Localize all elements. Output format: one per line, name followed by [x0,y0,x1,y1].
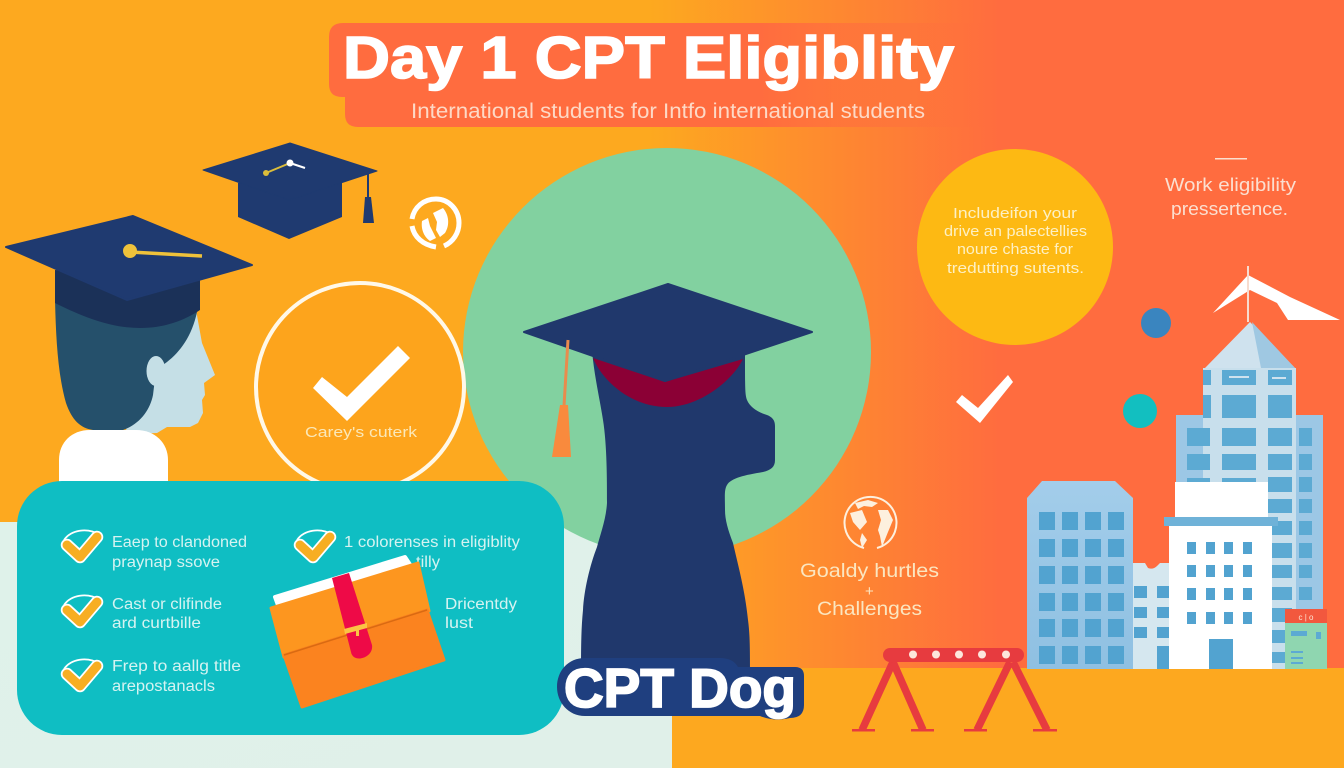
check circle callout: Carey's cuterk [305,424,418,441]
work eligibility text [1165,158,1297,219]
subtitle: International students for Intfo international students [411,100,925,123]
check item 2: ard curtbille [112,615,201,632]
icon: globe [844,497,896,548]
check item 3 [64,658,241,695]
middle building [1133,563,1169,669]
title: Day 1 CPT Eligiblity [343,25,954,91]
work eligibility text: pressertence. [1171,198,1288,219]
check item 4 [297,530,520,571]
yellow info circle [917,149,1113,345]
icon: white check [956,375,1013,423]
check item 4: tilly [416,554,440,571]
yellow info circle: noure chaste for [957,242,1073,258]
graduate silhouette with cap [524,284,812,680]
blue dot [1141,308,1171,338]
work eligibility text: Work eligibility [1165,174,1297,195]
side note: lust [445,615,474,632]
student face [125,310,215,434]
teal checklist panel [17,481,564,735]
white building [1164,482,1278,669]
cap button and cord [123,244,202,258]
CPT Dog badge: CPT Dog [564,657,796,719]
student profile with cap [6,216,252,482]
check circle callout [256,283,464,491]
student hair [55,300,197,430]
yellow info circle: tredutting sutents. [947,261,1084,277]
crimson band [593,358,743,407]
left building [1027,481,1133,669]
student ear [146,356,166,386]
small shop: c | o [1299,613,1314,622]
yellow info circle: drive an palectellies [944,224,1087,240]
small shop [1285,609,1327,669]
silhouette body [581,350,775,680]
check item 1: praynap ssove [112,554,220,571]
icon: orange folder [271,557,444,707]
check item 3: arepostanacls [112,678,215,695]
yellow info circle: Includeifon your [953,206,1077,222]
check item 1: Eaep to clandoned [112,534,247,551]
tower with flag [1176,266,1340,669]
cap board [6,216,252,300]
cap band [55,270,200,328]
student shoulders [59,430,168,482]
icon: circular arrows [412,199,459,247]
city buildings [1027,266,1340,669]
icon: small graduation cap [203,143,377,239]
teal dot [1123,394,1157,428]
tassel [552,340,571,457]
side note: Dricentdy [445,596,517,613]
check item 3: Frep to aallg title [112,658,241,675]
check item 2 [64,595,222,632]
hurdles and challenges text: + [865,583,874,600]
hurdles and challenges text: Goaldy hurtles [800,560,939,582]
title banner [329,23,1000,127]
check item 1 [64,530,247,571]
check item 2: Cast or clifinde [112,596,222,613]
hurdles and challenges text: Challenges [817,598,922,620]
large green circle [463,148,871,556]
cap board [524,284,812,381]
check item 4: 1 colorenses in eligiblity [344,534,520,551]
hurdle [852,648,1057,732]
